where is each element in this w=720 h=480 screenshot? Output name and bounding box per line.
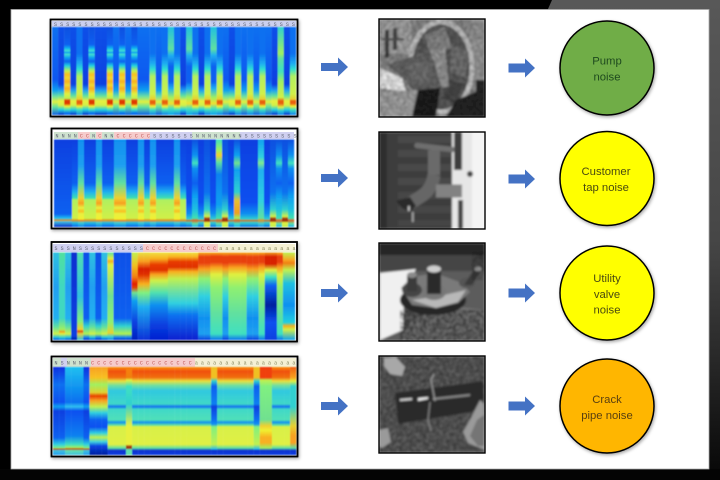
spectrogram: customer tap noise: NNNNCCNCNNCCCCCCSSSSSSSNNNNNNNNSSSSSSSSS xyxy=(56,134,300,140)
spectrogram: utility valve noise xyxy=(52,242,299,342)
label circle: crack pipe noise: Crack xyxy=(592,394,622,406)
label circle: utility valve noise: valve xyxy=(594,289,620,301)
label circle: crack pipe noise xyxy=(560,359,654,453)
arrow: pump photo to label xyxy=(508,58,535,78)
arrow: tap photo to label xyxy=(508,170,535,188)
photo: cracked pipe xyxy=(379,356,485,453)
label circle: utility valve noise xyxy=(560,246,654,340)
spectrogram: customer tap noise xyxy=(52,128,300,228)
spectrogram: crack pipe noise xyxy=(52,356,299,456)
arrow: crack photo to label xyxy=(508,396,535,416)
spectrogram: crack pipe noise: NSNNNNCCCCCCCCCCCCCCCCCaaaaaaaaaaaaaaaaa xyxy=(54,360,299,366)
spectrogram: pump noise xyxy=(50,20,298,116)
arrow: spectrogram to valve photo xyxy=(321,284,348,302)
spectrogram: utility valve noise: SSSNSSSSSSSSSSSCCCCCCCCCCCCaaaaaaaaaaaaa xyxy=(54,246,299,252)
photo: dripping tap xyxy=(379,132,485,229)
spectrogram: pump noise: SSSSSSSSSSSSSSSSSSSSSSSSSSSSSSSSSSSSSSSS xyxy=(54,22,298,28)
arrow: spectrogram to pump photo xyxy=(321,58,348,76)
photo: pump xyxy=(379,19,485,117)
label circle: customer tap noise: Customer xyxy=(582,166,631,178)
label circle: pump noise: Pump xyxy=(592,56,622,68)
label circle: utility valve noise: noise xyxy=(593,304,621,316)
label circle: customer tap noise: tap noise xyxy=(583,182,629,194)
arrow: spectrogram to tap photo xyxy=(321,168,348,188)
label circle: utility valve noise: Utility xyxy=(593,273,621,285)
label circle: pump noise xyxy=(560,21,654,115)
label circle: crack pipe noise: pipe noise xyxy=(581,410,633,422)
label circle: pump noise: noise xyxy=(593,72,621,84)
arrow: spectrogram to crack photo xyxy=(321,396,348,416)
arrow: valve photo to label xyxy=(508,284,535,302)
photo: utility valve xyxy=(379,243,485,341)
label circle: customer tap noise xyxy=(560,132,654,226)
